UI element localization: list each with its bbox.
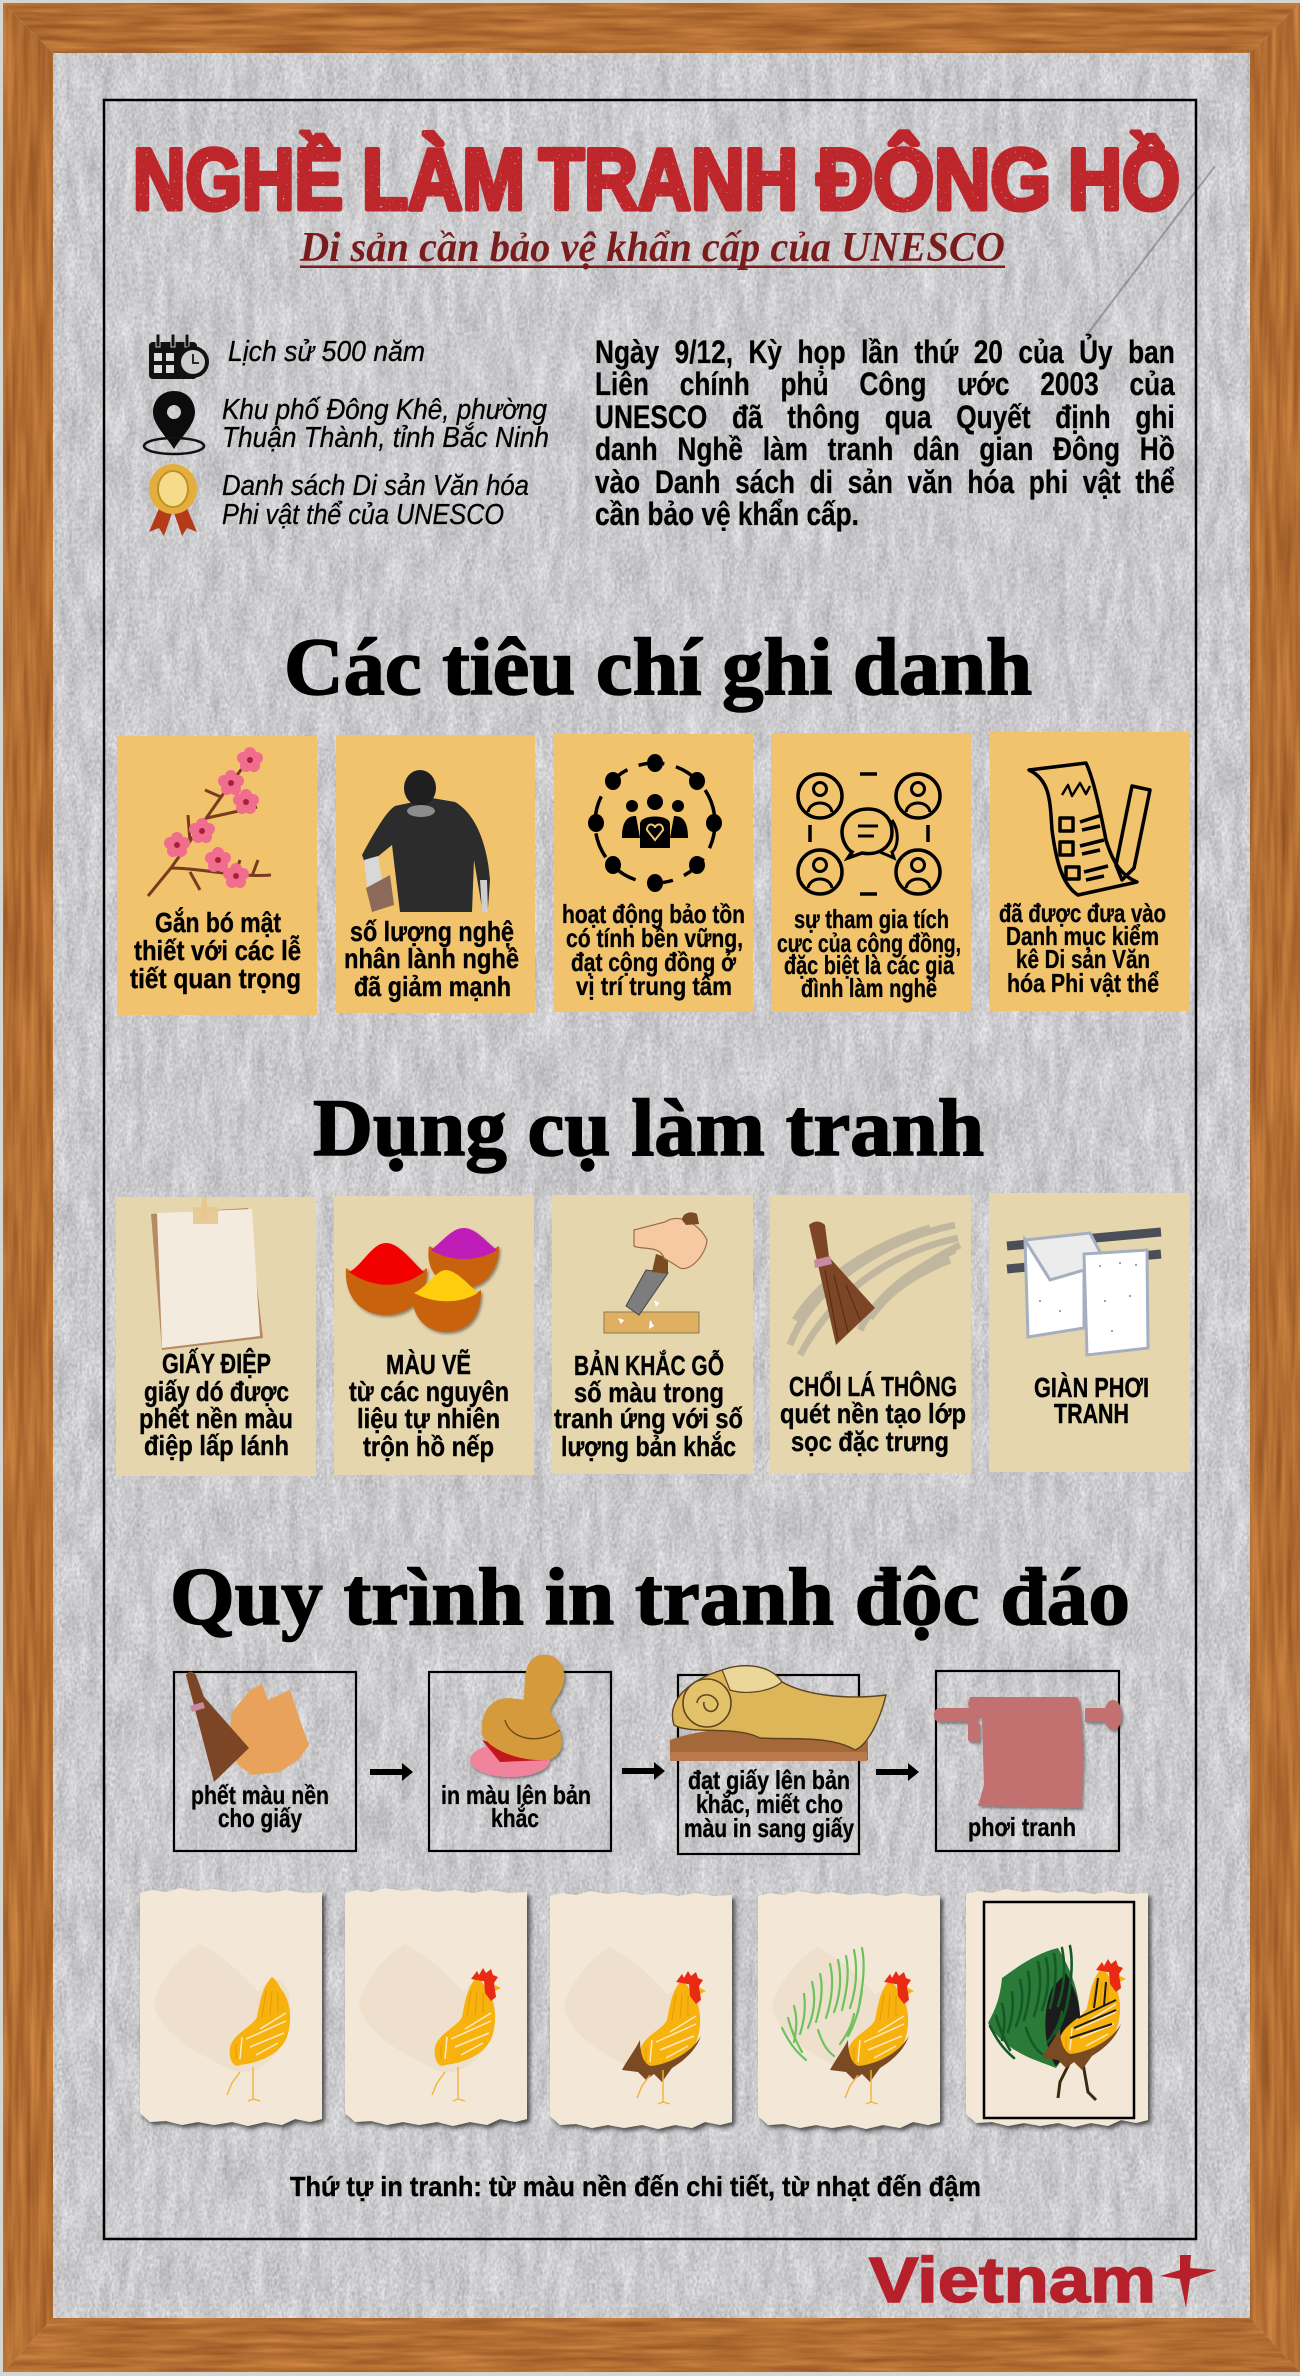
logo: Vietnam+: Vietnam — [869, 2244, 1156, 2316]
step 4 — [934, 1671, 1122, 1851]
text: history: Lịch sử 500 năm — [228, 336, 425, 368]
text: Gắn bó mật — [155, 907, 281, 938]
step 2 — [429, 1655, 611, 1851]
title: NGHỀ — [133, 132, 343, 228]
card: dó paper — [116, 1197, 316, 1476]
card 1 — [117, 736, 317, 1015]
text: list: Danh sách Di sản Văn hóa — [222, 470, 529, 502]
text: tiết quan trọng — [130, 963, 301, 994]
text: đình làm nghề — [801, 973, 937, 1003]
icon: broom with strokes — [790, 1222, 960, 1355]
text: đã giảm mạnh — [354, 971, 511, 1002]
text — [1034, 1372, 1149, 1429]
title: TRANH — [539, 132, 798, 228]
text: đặc biệt là các gia — [784, 950, 954, 980]
stage 3: brown added — [550, 1891, 732, 2129]
intro paragraph: vào Danh sách di sản văn hóa phi vật thể — [595, 464, 1175, 500]
text — [562, 899, 745, 1001]
icon: people in dialogue — [798, 774, 940, 894]
icon: community circle — [588, 754, 722, 892]
intro paragraph — [595, 334, 1175, 532]
card: drying rack — [989, 1193, 1190, 1472]
text: vị trí trung tâm — [576, 971, 732, 1001]
black inner border — [104, 100, 1196, 2239]
text — [780, 1370, 966, 1457]
stage 4: green added — [758, 1891, 940, 2129]
icon: calendar and clock — [149, 334, 209, 379]
stage 1: yellow layer — [140, 1888, 322, 2126]
fact list — [144, 334, 549, 536]
text — [191, 1780, 329, 1833]
step 1 — [174, 1672, 356, 1851]
text: hoạt động bảo tồn — [562, 899, 745, 929]
card: colours — [334, 1196, 534, 1475]
text — [777, 904, 961, 1003]
text: số lượng nghệ — [350, 916, 514, 947]
arrow — [370, 1763, 413, 1781]
text: sọc đặc trưng — [791, 1426, 949, 1457]
text — [441, 1780, 591, 1833]
card 2 — [336, 735, 535, 1013]
text: sự tham gia tích — [794, 904, 949, 934]
text: kê Di sản Văn — [1016, 944, 1150, 974]
text: list — [222, 470, 529, 531]
text: giấy dó được — [144, 1376, 289, 1407]
intro paragraph: cần bảo vệ khẩn cấp. — [595, 496, 859, 532]
text: từ các nguyên — [349, 1376, 509, 1407]
stage 5: finished rooster print — [966, 1889, 1148, 2127]
icon: paint blotch and broom — [186, 1672, 309, 1782]
heading: process: Quy trình in tranh độc đáo — [170, 1551, 1130, 1642]
icon: sheet of paper — [151, 1197, 263, 1350]
text: MÀU VẼ — [386, 1349, 471, 1380]
title: HỒ — [1068, 132, 1180, 228]
icon: hand with chisel — [604, 1212, 707, 1333]
text: tranh ứng với số — [554, 1403, 743, 1434]
text: có tính bền vững, — [566, 923, 743, 953]
text: list: Phi vật thể của UNESCO — [222, 499, 504, 531]
text: liệu tự nhiên — [357, 1403, 500, 1434]
heading: criteria: Các tiêu chí ghi danh — [284, 621, 1032, 712]
text: phết nền màu — [139, 1403, 293, 1434]
text — [554, 1349, 743, 1462]
text: TRANH — [1054, 1398, 1129, 1429]
icon: paper scroll on wood block — [670, 1666, 886, 1761]
title: ĐÔNG — [817, 132, 1051, 228]
text: location: Khu phố Đông Khê, phường — [222, 394, 547, 426]
intro paragraph: Liên chính phủ Công ước 2003 của — [595, 366, 1175, 402]
icon: stamp — [470, 1655, 564, 1777]
intro paragraph: danh Nghề làm tranh dân gian Đông Hồ — [595, 431, 1175, 467]
icon: map pin — [144, 391, 204, 454]
text: thiết với các lễ — [134, 935, 301, 966]
subtitle: Di sản cần bảo vệ khẩn cấp của UNESCO — [299, 225, 1005, 271]
text: khắc — [491, 1803, 539, 1833]
arrow — [876, 1763, 919, 1781]
text: nhân lành nghề — [344, 943, 519, 974]
text: đạt cộng đồng ở — [571, 947, 736, 977]
text — [139, 1348, 293, 1461]
heading: tools: Dụng cụ làm tranh — [313, 1082, 984, 1173]
text: in màu lên bản — [441, 1780, 591, 1810]
text: Danh mục kiểm — [1006, 921, 1159, 951]
text: điệp lấp lánh — [144, 1430, 289, 1461]
arrow — [622, 1762, 665, 1780]
photo: craftsman silhouette — [362, 770, 490, 912]
title: LÀM — [362, 132, 525, 228]
text: khắc, miết cho — [696, 1789, 843, 1819]
text: trộn hồ nếp — [363, 1431, 494, 1462]
card: pine broom — [770, 1195, 971, 1473]
panel: printing stages — [140, 1888, 1148, 2129]
stage 2: red comb added — [345, 1888, 527, 2126]
text: quét nền tạo lớp — [780, 1398, 966, 1429]
panel: criteria cards — [117, 732, 1190, 1015]
text — [344, 916, 519, 1002]
icon: peach blossom branch — [148, 747, 271, 896]
text: BẢN KHẮC GỖ — [574, 1349, 724, 1381]
text: đã được đưa vào — [999, 898, 1166, 928]
text — [999, 898, 1166, 998]
text: màu in sang giấy — [684, 1813, 854, 1843]
panel: tool cards — [116, 1193, 1190, 1476]
card: woodblock — [552, 1195, 753, 1474]
icon: towel on rail — [934, 1697, 1122, 1808]
title — [133, 132, 1180, 228]
text: GIẤY ĐIỆP — [162, 1348, 271, 1379]
panel: process steps — [174, 1655, 1122, 1854]
text — [130, 907, 301, 994]
text: số màu trong — [574, 1377, 724, 1408]
icon: checklist and pencil — [1029, 763, 1150, 895]
card 4 — [771, 733, 971, 1012]
text: location — [222, 394, 549, 454]
card 3 — [554, 734, 753, 1012]
step 3 — [670, 1666, 886, 1854]
intro paragraph: UNESCO đã thông qua Quyết định ghi — [595, 399, 1175, 435]
text: lượng bản khắc — [561, 1431, 736, 1462]
text: cực của cộng đồng, — [777, 928, 961, 958]
intro paragraph: Ngày 9/12, Kỳ họp lần thứ 20 của Ủy ban — [595, 334, 1175, 370]
icon: paper on drying rack — [1007, 1232, 1161, 1355]
card 5 — [990, 732, 1190, 1011]
text: GIÀN PHƠI — [1034, 1372, 1149, 1403]
icon: gold medal — [149, 464, 197, 536]
caption: Thứ tự in tranh: từ màu nền đến chi tiết, từ nhạt đến đậm — [290, 2171, 981, 2202]
text: cho giấy — [218, 1803, 302, 1833]
text — [684, 1765, 854, 1843]
text: CHỔI LÁ THÔNG — [789, 1370, 957, 1402]
text — [349, 1349, 509, 1462]
text: location: Thuận Thành, tỉnh Bắc Ninh — [222, 421, 549, 454]
text: phơi tranh — [968, 1812, 1076, 1842]
icon: pigment bowls — [346, 1228, 499, 1332]
text: hóa Phi vật thể — [1007, 968, 1159, 998]
text: đạt giấy lên bản — [688, 1765, 850, 1795]
text: phết màu nền — [191, 1780, 329, 1810]
